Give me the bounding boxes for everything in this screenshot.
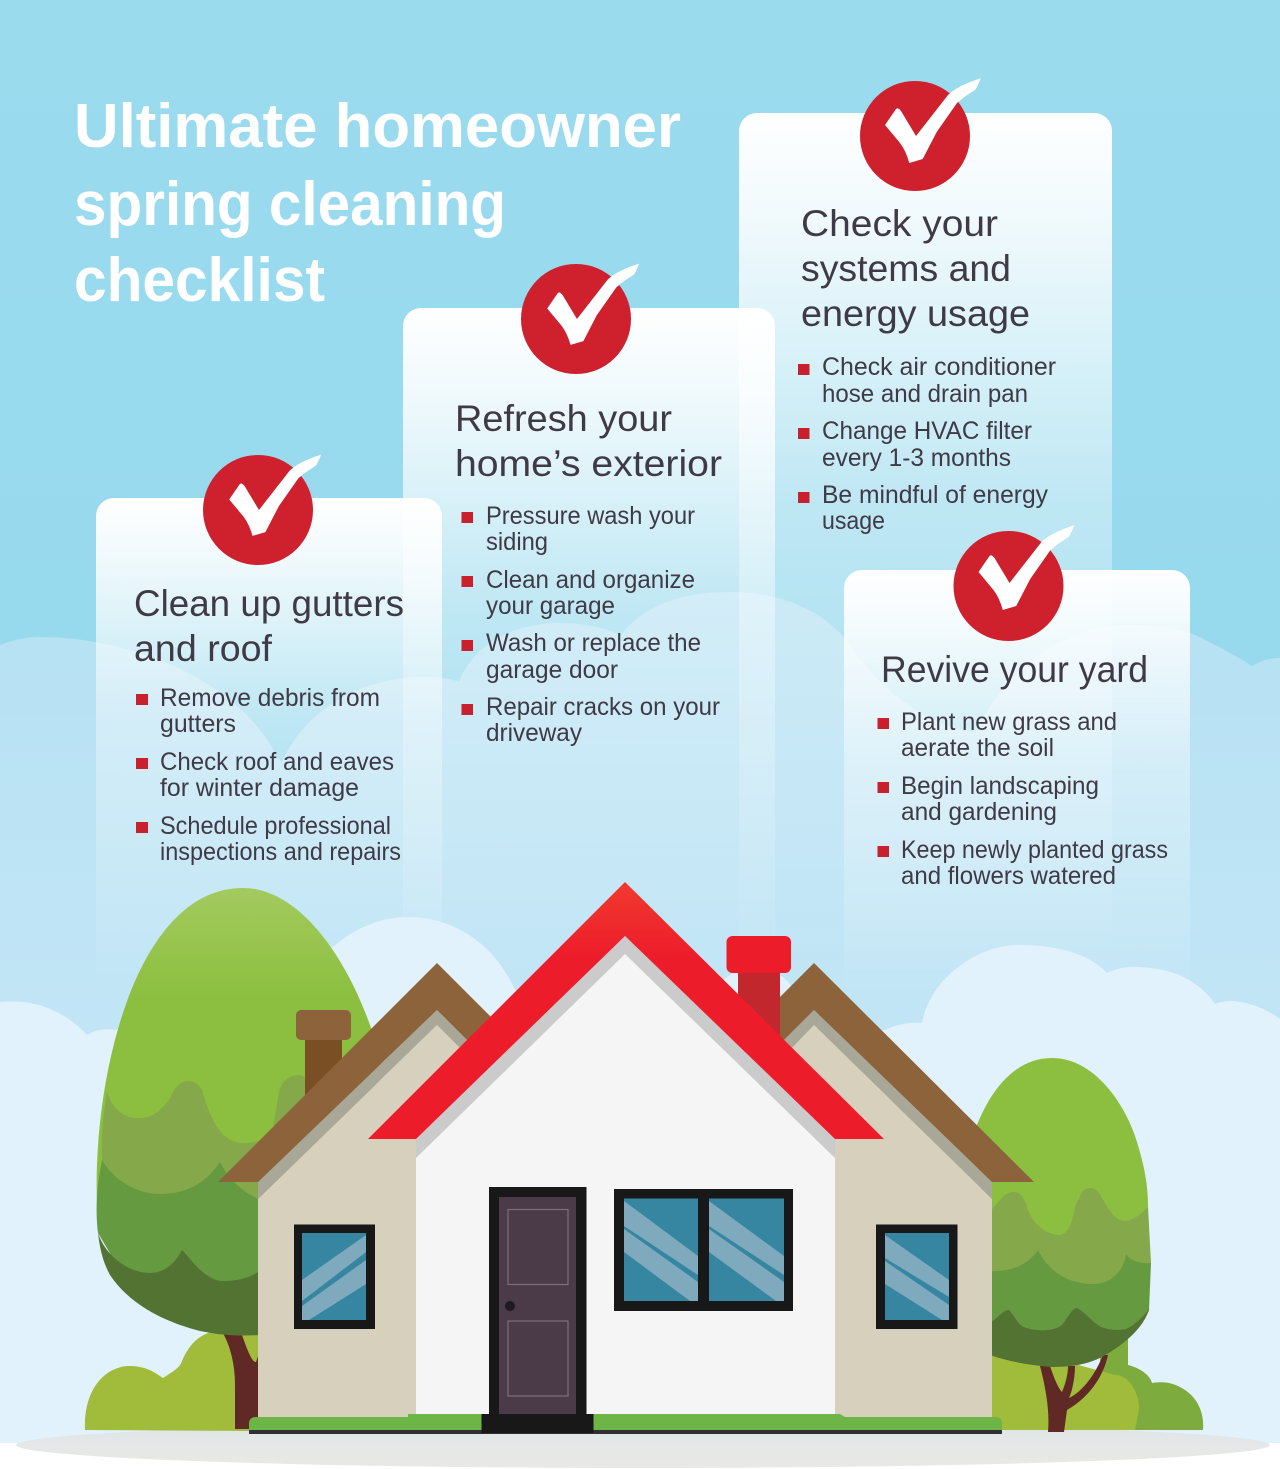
- left tree and bushes: [85, 888, 380, 1431]
- checklist: driveway: [486, 719, 582, 747]
- checklist: Keep newly planted grass: [901, 836, 1168, 864]
- red roof: [368, 882, 884, 1139]
- heading: energy usage: [801, 293, 1030, 334]
- crown right mid layer: [990, 1188, 1151, 1300]
- checklist: hose and drain pan: [822, 380, 1028, 408]
- checklist: usage: [822, 507, 885, 535]
- icon: red check badge: [203, 455, 321, 565]
- icon: red check badge: [521, 264, 639, 374]
- checklist: and flowers watered: [901, 862, 1116, 890]
- crown left: [97, 888, 380, 1250]
- trunk right: [1040, 1355, 1108, 1432]
- checklist: Clean and organize: [486, 566, 695, 594]
- red chimney: [726, 936, 791, 1045]
- door step: [482, 1414, 594, 1433]
- right wing: [760, 963, 1034, 1417]
- checklist: [798, 353, 1056, 535]
- title: spring cleaning: [74, 170, 506, 239]
- checklist: [462, 502, 720, 747]
- heading: home’s exterior: [455, 443, 722, 484]
- checklist: Check roof and eaves: [160, 748, 394, 776]
- checklist: [878, 708, 1168, 890]
- checklist: Schedule professional: [160, 812, 391, 840]
- bushes left: [85, 1331, 260, 1431]
- left chimney: [296, 1010, 351, 1100]
- checklist: every 1-3 months: [822, 444, 1011, 472]
- checklist: garage door: [486, 656, 618, 684]
- lawn strip: [249, 1414, 1002, 1434]
- checklist: Remove debris from: [160, 684, 380, 712]
- checklist: Pressure wash your: [486, 502, 695, 530]
- heading: Clean up gutters: [134, 583, 404, 624]
- back cloud layer: [0, 592, 1280, 1100]
- bushes right back: [1100, 1335, 1203, 1430]
- door: [489, 1187, 586, 1415]
- crown left mid layer: [102, 1075, 340, 1230]
- front cloud layer: [0, 917, 1280, 1445]
- checklist: Plant new grass and: [901, 708, 1117, 736]
- icon: red check badge: [860, 78, 981, 191]
- icon: red check badge: [954, 525, 1074, 641]
- right tree and bushes: [975, 1058, 1203, 1432]
- bushes right front: [990, 1340, 1139, 1430]
- house: [218, 882, 1034, 1434]
- crown left dark layer: [98, 1233, 262, 1336]
- checklist: Check air conditioner: [822, 353, 1056, 381]
- checklist: Be mindful of energy: [822, 481, 1048, 509]
- checklist: inspections and repairs: [160, 838, 401, 866]
- crown right dark layer: [990, 1308, 1149, 1367]
- left window: [294, 1224, 375, 1329]
- heading: Refresh your: [455, 398, 672, 439]
- heading: Check your: [801, 203, 998, 244]
- checklist: Wash or replace the: [486, 629, 701, 657]
- checklist: aerate the soil: [901, 734, 1054, 762]
- checklist: for winter damage: [160, 774, 359, 802]
- panel: revive your yard: [844, 525, 1190, 1000]
- white foreground strip: [0, 1443, 1280, 1469]
- checklist: Repair cracks on your: [486, 693, 720, 721]
- right window: [876, 1224, 958, 1329]
- panel: clean up gutters and roof: [96, 455, 442, 988]
- checklist: and gardening: [901, 798, 1057, 826]
- left wing: [218, 963, 505, 1417]
- checklist: siding: [486, 528, 548, 556]
- checklist: Begin landscaping: [901, 772, 1099, 800]
- title: checklist: [74, 246, 325, 315]
- roof underside shadow: [416, 936, 835, 1158]
- crown right green layer: [990, 1250, 1151, 1340]
- title: Ultimate homeowner: [74, 92, 681, 161]
- small cloud behind chimney: [715, 968, 795, 1032]
- main wall: [416, 954, 835, 1415]
- panel: refresh your home's exterior: [403, 264, 775, 988]
- checklist: [136, 684, 401, 866]
- checklist: your garage: [486, 592, 615, 620]
- panel: check your systems and energy usage: [739, 78, 1112, 973]
- checklist: gutters: [160, 710, 236, 738]
- heading: Revive your yard: [881, 649, 1148, 690]
- checklist: Change HVAC filter: [822, 417, 1032, 445]
- heading: and roof: [134, 628, 273, 669]
- crown right: [975, 1058, 1148, 1300]
- main window: [614, 1189, 793, 1311]
- crown left green layer: [97, 1160, 300, 1300]
- ground shadow: [16, 1422, 1270, 1468]
- trunk left: [223, 1333, 262, 1429]
- heading: systems and: [801, 248, 1011, 289]
